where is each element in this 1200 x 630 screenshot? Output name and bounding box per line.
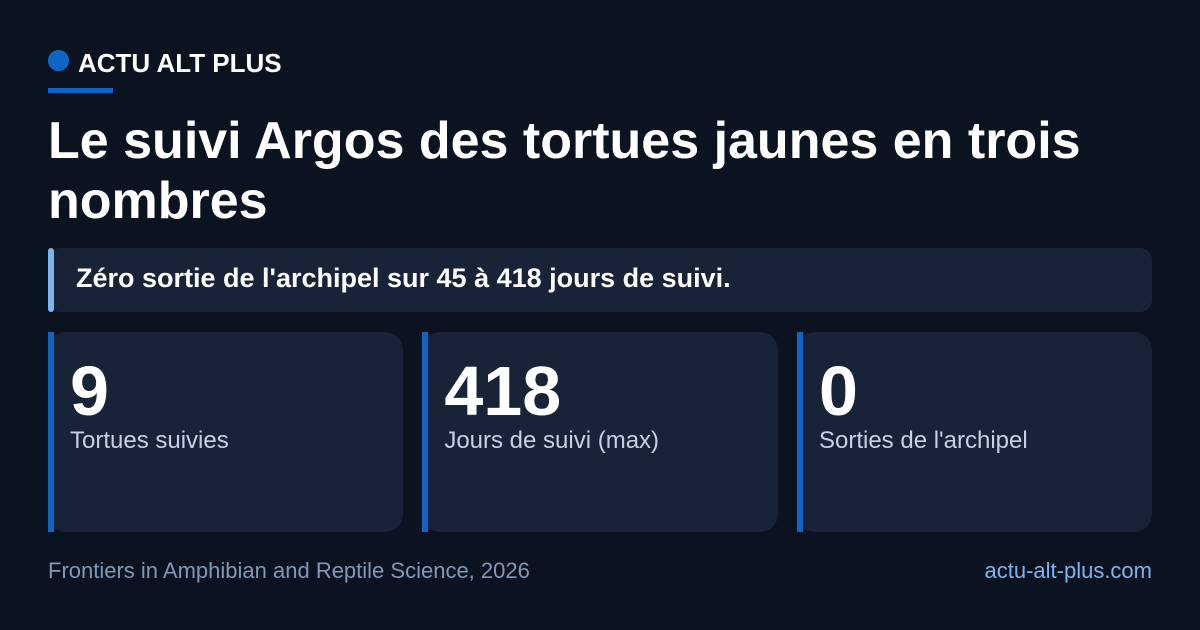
brand underline [48,88,113,93]
label: Jours de suivi (max) [444,427,659,454]
source: Frontiers in Amphibian and Reptile Science, 2026 [48,558,530,583]
callout [48,248,1152,312]
stat card: jours de suivi [422,332,778,532]
brand name: ACTU ALT PLUS [78,48,282,78]
stat card: tortues suivies [48,332,403,532]
title: nombres [48,172,268,230]
value: 418 [444,352,561,430]
label: Sorties de l'archipel [819,427,1028,454]
site url: actu-alt-plus.com [984,558,1152,583]
value: 0 [819,352,858,430]
stat card: sorties de l'archipel [797,332,1152,532]
callout accent bar [48,248,54,312]
title: Le suivi Argos des tortues jaunes en trois [48,112,1081,170]
callout text: Zéro sortie de l'archipel sur 45 à 418 jours de suivi. [76,263,731,293]
brand dot [48,50,69,71]
title [48,112,1081,230]
label: Tortues suivies [70,427,229,454]
value: 9 [70,352,109,430]
